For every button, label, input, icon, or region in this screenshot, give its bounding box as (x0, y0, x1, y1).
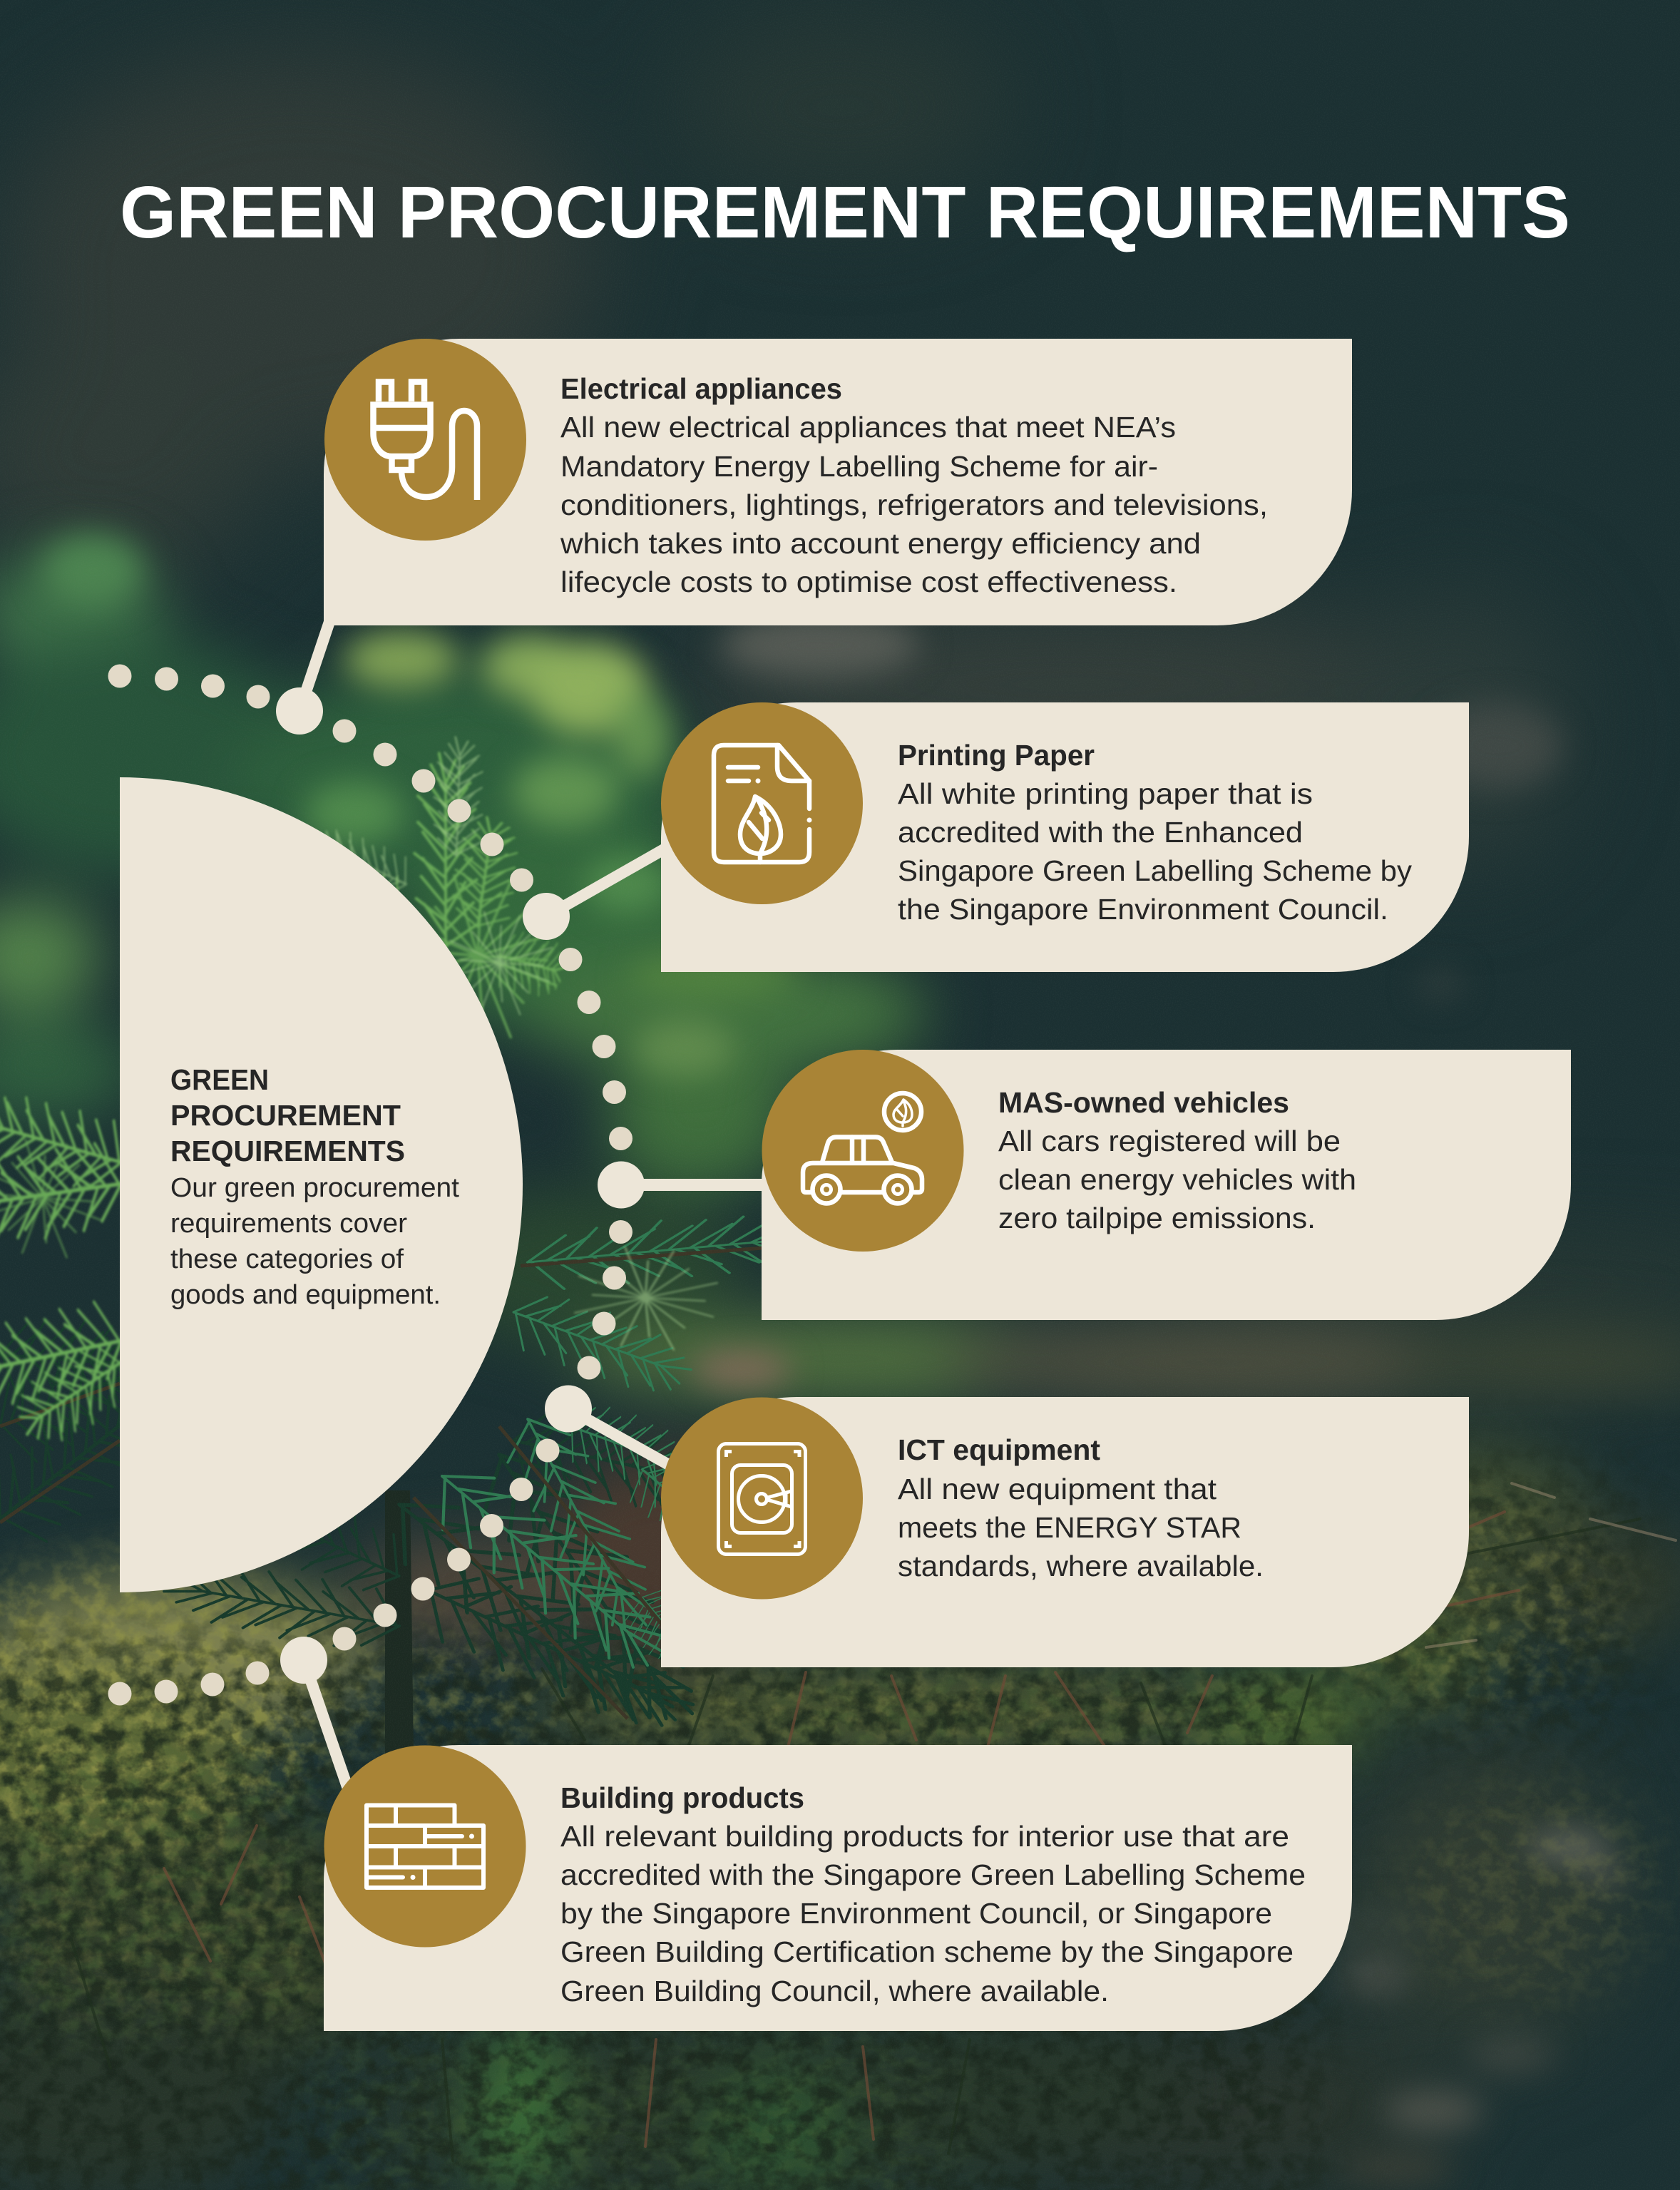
text: building products: Building products (560, 1781, 804, 1814)
heading: green procurement requirements: GREEN (170, 1063, 269, 1096)
text: printing paper: the Singapore Environment Council. (898, 893, 1388, 926)
icon: brick wall (324, 1746, 526, 1947)
text: ICT equipment (898, 1433, 1264, 1582)
text: overview description (170, 1173, 459, 1310)
panel: ICT equipment (661, 1397, 1469, 1667)
dotted arc timeline (108, 665, 632, 1706)
text: electrical appliances (560, 372, 1268, 598)
text: printing paper (898, 739, 1413, 926)
text: building products: by the Singapore Environment Council, or Singapore (560, 1897, 1272, 1930)
text: electrical appliances: Electrical appliances (560, 372, 842, 405)
text: MAS-owned vehicles: MAS-owned vehicles (998, 1086, 1289, 1119)
text: printing paper: Singapore Green Labelling Scheme by (898, 854, 1413, 887)
connector 1: electrical appliances (276, 613, 332, 735)
text: ICT equipment: ICT equipment (898, 1433, 1100, 1466)
heading: green procurement requirements (170, 1063, 405, 1167)
text: overview description: requirements cover (170, 1209, 407, 1239)
text: overview description: goods and equipment. (170, 1280, 441, 1310)
text: electrical appliances: Mandatory Energy Labelling Scheme for air- (560, 450, 1158, 483)
text: electrical appliances: conditioners, lightings, refrigerators and televisions, (560, 488, 1268, 521)
connector 5: building products (280, 1637, 351, 1797)
text: overview description: Our green procurement (170, 1173, 459, 1203)
heading: green procurement requirements: PROCUREMENT (170, 1099, 401, 1132)
text: MAS-owned vehicles: clean energy vehicles with (998, 1163, 1356, 1196)
text: printing paper: Printing Paper (898, 739, 1095, 772)
text: building products: All relevant building products for interior use that are (560, 1820, 1289, 1853)
text: ICT equipment: All new equipment that (898, 1473, 1217, 1505)
text: electrical appliances: All new electrical appliances that meet NEA’s (560, 411, 1176, 444)
connector 3: vehicles (598, 1161, 770, 1208)
connector 2: printing paper (523, 844, 674, 940)
text: building products: accredited with the Singapore Green Labelling Scheme (560, 1858, 1306, 1891)
icon: paper with leaf (661, 702, 863, 904)
panel: printing paper (661, 702, 1469, 972)
panel: building products (324, 1745, 1352, 2031)
text: building products (560, 1781, 1306, 2007)
heading: green procurement requirements: REQUIREMENTS (170, 1135, 405, 1167)
panel: MAS-owned vehicles (762, 1050, 1571, 1320)
text: ICT equipment: meets the ENERGY STAR (898, 1511, 1241, 1544)
icon: hard disk (661, 1398, 863, 1599)
text: MAS-owned vehicles: All cars registered will be (998, 1125, 1341, 1157)
background: pine sapling with needles (0, 736, 809, 1754)
text: MAS-owned vehicles (998, 1086, 1356, 1234)
icon: plug (324, 339, 526, 541)
connector 4: ICT equipment (545, 1385, 674, 1468)
panel: central half circle (120, 777, 523, 1592)
text: MAS-owned vehicles: zero tailpipe emissions. (998, 1202, 1316, 1234)
text: electrical appliances: lifecycle costs to optimise cost effectiveness. (560, 566, 1177, 598)
icon: car with leaf badge (762, 1050, 964, 1252)
text: printing paper: accredited with the Enhanced (898, 816, 1303, 849)
text: overview description: these categories of (170, 1244, 404, 1274)
text: electrical appliances: which takes into account energy efficiency and (560, 527, 1201, 560)
text: building products: Green Building Council, where available. (560, 1975, 1109, 2007)
text: ICT equipment: standards, where available. (898, 1550, 1264, 1582)
text: printing paper: All white printing paper that is (898, 777, 1313, 810)
text: building products: Green Building Certification scheme by the Singapore (560, 1935, 1294, 1968)
page title: GREEN PROCUREMENT REQUIREMENTS (120, 171, 1570, 253)
panel: electrical appliances (324, 339, 1352, 625)
tree trunk (385, 1490, 414, 1754)
